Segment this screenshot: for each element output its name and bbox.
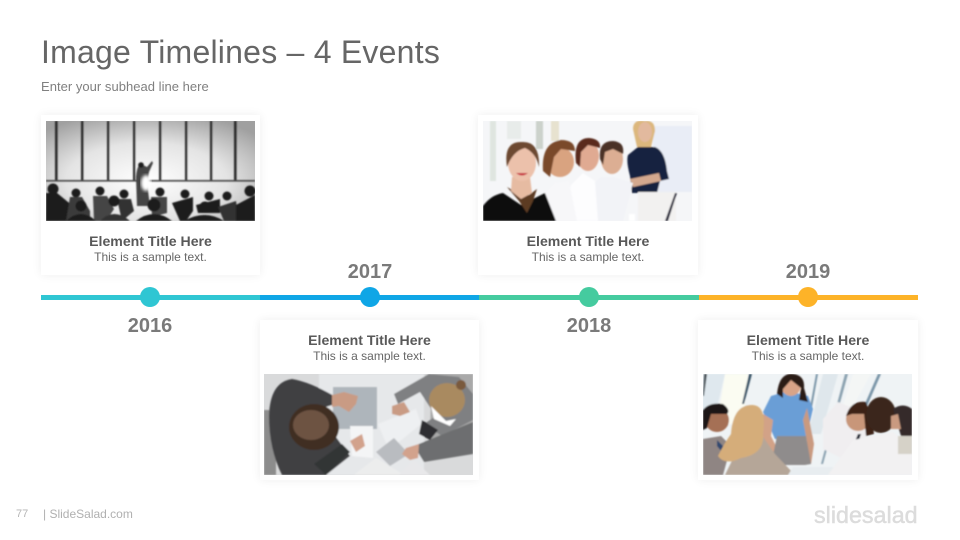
segment 2017 xyxy=(260,295,479,300)
photo: overhead view of two people reviewing documents xyxy=(264,374,473,475)
subhead: Enter your subhead line here xyxy=(41,79,209,94)
segment 2019 xyxy=(699,295,918,300)
sample text: This is a sample text. xyxy=(532,250,644,264)
segment 2018 xyxy=(479,295,699,300)
photo: woman presenting to colleagues at a table xyxy=(703,374,912,475)
element title: Element Title Here xyxy=(308,332,431,348)
year label 2017: 2017 xyxy=(348,261,392,283)
photo: smiling team seated at a table xyxy=(483,121,692,221)
card: 2019 event xyxy=(698,320,918,480)
element title: Element Title Here xyxy=(527,233,649,249)
sample text: This is a sample text. xyxy=(94,250,207,264)
year label 2018: 2018 xyxy=(567,315,611,337)
card: 2016 event xyxy=(41,115,260,275)
segment 2016 xyxy=(41,295,260,300)
title: Image Timelines – 4 Events xyxy=(41,34,440,70)
element title: Element Title Here xyxy=(89,233,212,249)
year label 2019: 2019 xyxy=(786,261,830,283)
sample text: This is a sample text. xyxy=(752,348,864,362)
marker 2016 xyxy=(140,287,160,307)
sample text: This is a sample text. xyxy=(313,348,426,362)
logo wordmark: slidesalad xyxy=(814,502,918,528)
footer source: | SlideSalad.com xyxy=(43,507,133,521)
page number: 77 xyxy=(16,508,28,520)
year label 2016: 2016 xyxy=(128,315,172,337)
marker 2019 xyxy=(798,287,818,307)
card: 2017 event xyxy=(260,320,479,480)
marker 2017 xyxy=(360,287,380,307)
timeline bar xyxy=(41,295,918,300)
element title: Element Title Here xyxy=(747,332,869,348)
marker 2018 xyxy=(579,287,599,307)
photo: silhouetted audience and presenter xyxy=(46,121,255,221)
card: 2018 event xyxy=(478,115,698,275)
